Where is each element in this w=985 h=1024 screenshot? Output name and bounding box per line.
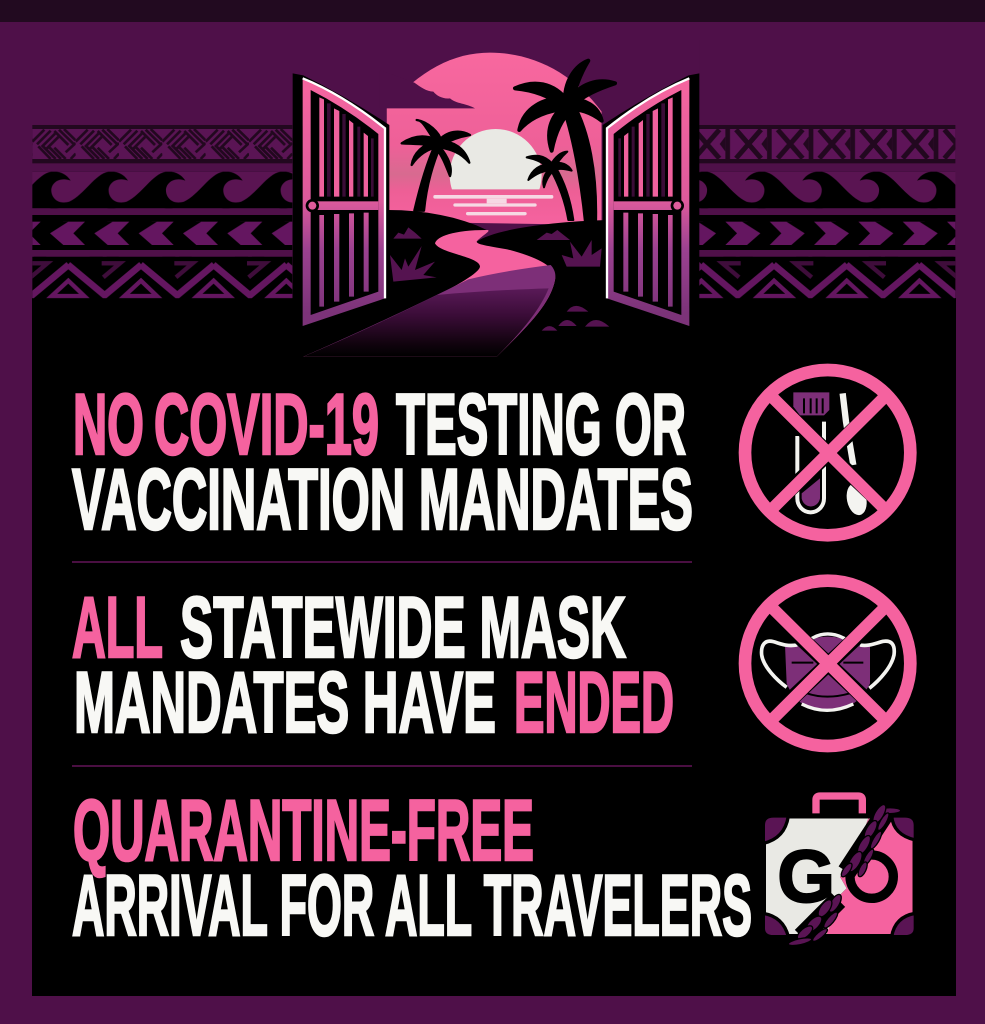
- tribal band: right: [695, 125, 955, 298]
- headline 3: QUARANTINE-FREE: [73, 783, 534, 879]
- test tube: [793, 392, 829, 512]
- headline 2: MANDATES HAVE: [74, 655, 496, 751]
- water reflections: [433, 195, 553, 215]
- case right half: [826, 818, 913, 934]
- headline 1: [72, 377, 693, 548]
- headline 1: TESTING OR: [396, 377, 686, 473]
- headline 3: [72, 783, 752, 954]
- corners: [763, 816, 915, 937]
- illustration: open gates and tropical sunset: [293, 40, 700, 360]
- broken chain: [788, 803, 901, 947]
- prohibition sign: [745, 370, 910, 535]
- pink sky disc: [387, 53, 602, 225]
- headline 2: ENDED: [514, 655, 674, 751]
- tribal band: left: [32, 125, 292, 298]
- top dark strip: [0, 0, 985, 22]
- bushes and grasses: [390, 227, 609, 331]
- cloud: [380, 70, 475, 108]
- mask: [762, 634, 894, 710]
- path shade: [303, 265, 555, 357]
- backdrop behind the scene: [293, 40, 700, 125]
- large palm: [515, 61, 615, 225]
- left palm: [402, 120, 470, 211]
- black content panel: [32, 298, 956, 996]
- handle: [816, 796, 862, 813]
- swab: [843, 393, 869, 517]
- black ground: [300, 210, 608, 360]
- right gate: [603, 73, 699, 331]
- headline 2: ALL: [72, 580, 163, 676]
- headline 1: COVID-19: [154, 377, 379, 473]
- go lettering o: [850, 855, 893, 898]
- icon: no masks: [745, 581, 910, 746]
- go lettering: G: [777, 835, 835, 918]
- headline 2: [72, 580, 674, 751]
- path fade: [303, 288, 549, 357]
- headline 1: NO: [73, 377, 144, 473]
- winding path: [303, 230, 555, 357]
- small palm: [527, 152, 573, 220]
- left gate: [293, 73, 389, 331]
- sun: [450, 129, 542, 190]
- icon: suitcase with broken chain: [763, 796, 915, 947]
- case left half: [766, 818, 868, 934]
- prohibition sign: [745, 581, 910, 746]
- headline 2: STATEWIDE MASK: [180, 580, 626, 676]
- icon: no testing: [745, 370, 910, 535]
